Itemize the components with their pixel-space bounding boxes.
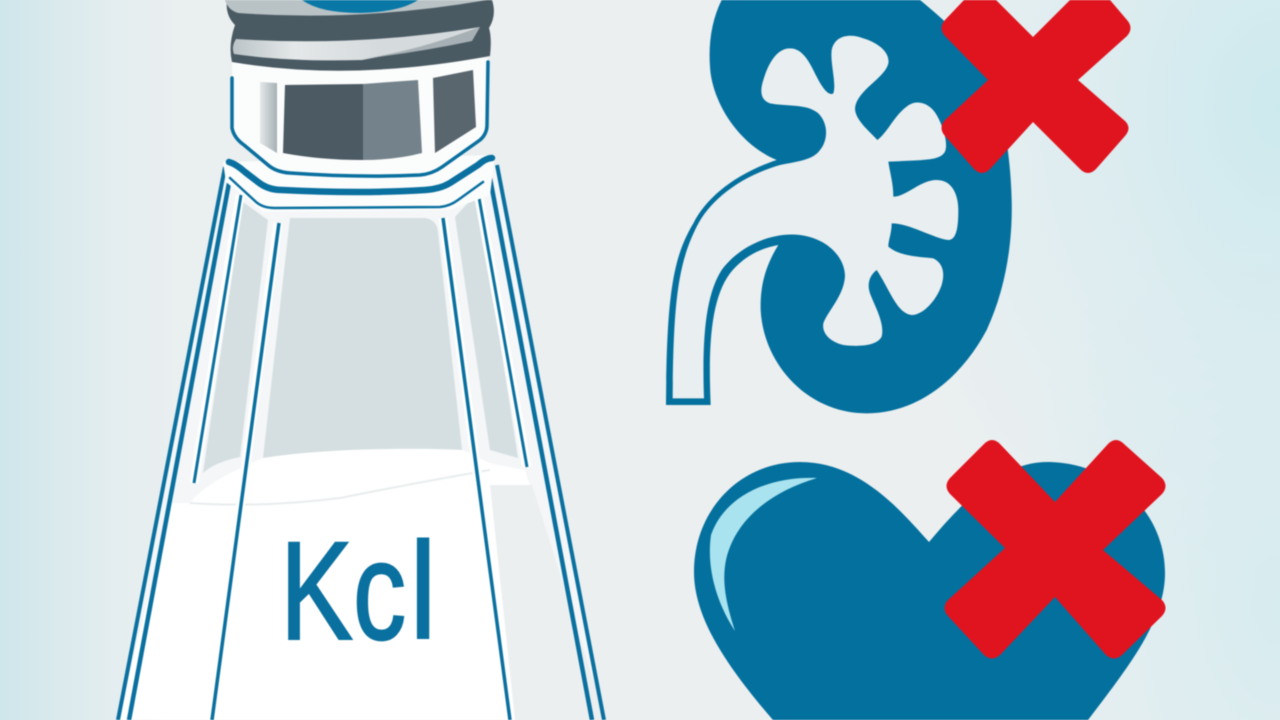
heart highlight [710,478,817,631]
KCl label: K [280,512,353,669]
blue dome on cap [302,0,418,13]
white highlights along glass lines [194,192,527,720]
neck windows [260,70,476,160]
heart icon [694,462,1165,720]
red cross over heart [944,440,1166,658]
shaker glass body [118,165,606,720]
salt shaker [118,0,606,720]
renal pelvis and ureter interior [673,36,958,398]
collar outlines [229,62,492,208]
grey glass panels [203,193,518,473]
salt fill [118,449,606,720]
KCl label: c [353,513,406,669]
blue glass outlines [118,165,604,720]
metal cap [225,0,494,71]
heart shape [694,462,1165,720]
neck collar [232,58,488,175]
kidney icon [666,0,1012,413]
KCl label [280,512,439,669]
KCl label: l [408,512,439,669]
red cross over kidney [942,0,1130,173]
kidney body and ureter outline [666,0,1012,413]
